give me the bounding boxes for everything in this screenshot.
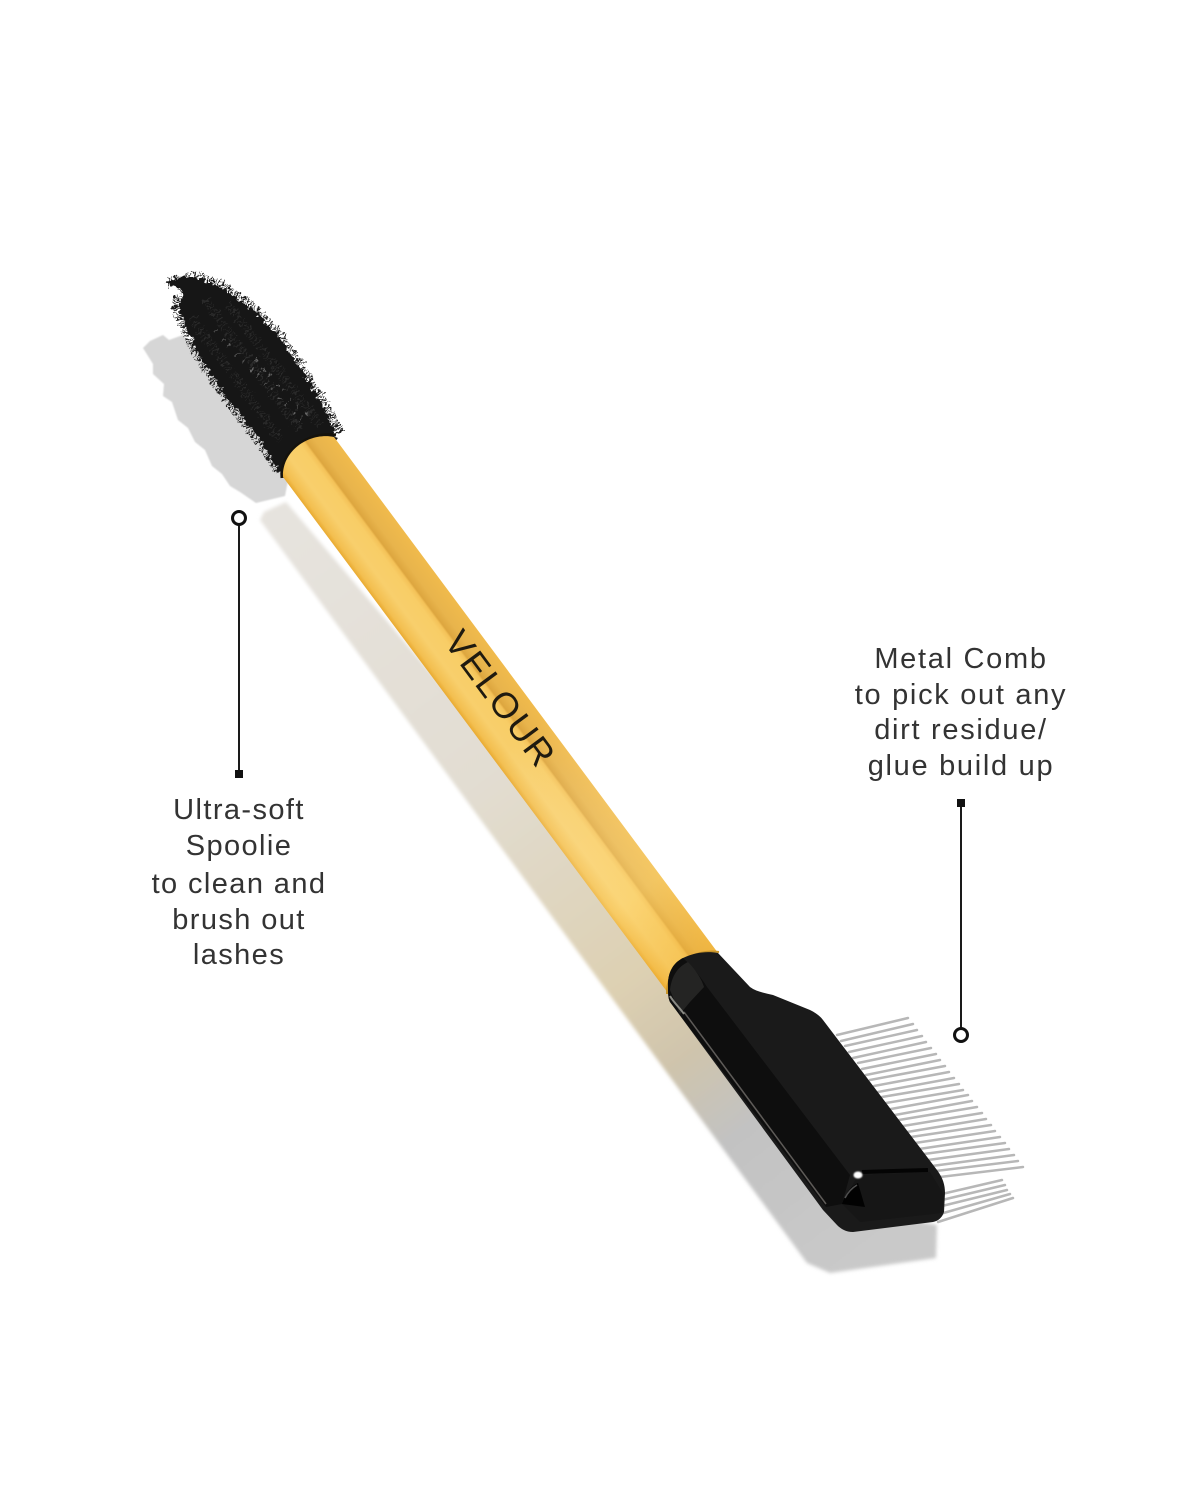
head body — [668, 952, 945, 1232]
head collar highlight — [670, 996, 684, 1014]
callout text: Spoolie — [186, 830, 292, 862]
callout text: Metal Comb — [874, 643, 1048, 675]
end bevel shine — [845, 1185, 857, 1198]
gold handle — [282, 435, 718, 993]
handle shadow — [260, 502, 937, 1273]
handle lower glow — [283, 436, 718, 993]
callout text — [152, 794, 326, 971]
bristle core — [166, 277, 336, 472]
head collar sheen — [670, 962, 704, 1014]
callout text: lashes — [193, 939, 285, 971]
end bevel gloss — [842, 1183, 865, 1207]
ring marker — [232, 512, 246, 524]
callout line — [960, 803, 962, 1035]
callout text — [855, 643, 1067, 782]
brand name: VELOUR — [437, 622, 564, 774]
callout line — [238, 518, 240, 773]
spoolie shadow — [143, 335, 290, 503]
black comb head — [667, 951, 945, 1232]
comb teeth — [837, 1018, 1023, 1222]
square marker — [957, 799, 965, 807]
gloss point — [854, 1172, 862, 1178]
handle body — [283, 436, 718, 993]
callout text: brush out — [172, 904, 306, 936]
callout text: Ultra-soft — [173, 794, 305, 826]
callout: spoolie — [152, 512, 326, 971]
head lower edge highlight — [684, 1012, 826, 1204]
bristle fringe — [168, 276, 340, 470]
callout text: dirt residue/ — [874, 714, 1048, 746]
callout text: to pick out any — [855, 679, 1067, 711]
callout text: glue build up — [868, 750, 1054, 782]
end bevel line — [862, 1170, 928, 1172]
spoolie collar — [282, 435, 336, 478]
callout: metal comb — [855, 643, 1067, 1042]
square marker — [235, 770, 243, 778]
callout text: to clean and — [152, 868, 326, 900]
bristle highlights — [215, 330, 310, 425]
head left facet — [668, 958, 850, 1207]
brush shadow — [143, 335, 937, 1273]
bristle texture — [192, 300, 320, 440]
ferrule gold ring — [667, 951, 719, 994]
ring marker — [954, 1028, 968, 1042]
spoolie bristles — [166, 276, 340, 472]
end bevel face — [842, 1172, 944, 1222]
